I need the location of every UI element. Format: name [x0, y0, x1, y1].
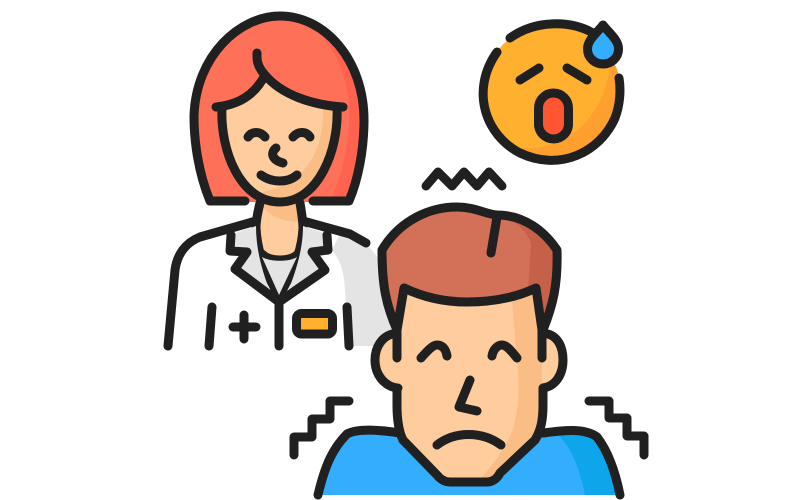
- icon: sweating shocked emoji: [483, 24, 621, 162]
- patient eyes: [421, 345, 517, 358]
- icon: doctor hair: [194, 16, 364, 202]
- patient nose: [459, 380, 477, 411]
- emoji outline: [483, 24, 620, 160]
- icon: medical cross: [233, 315, 256, 339]
- stress squiggle above head: [426, 172, 502, 186]
- icon: doctor face: [216, 53, 343, 202]
- patient ears: [375, 334, 563, 388]
- doctor smile: [261, 175, 297, 181]
- doctor nose: [273, 148, 283, 163]
- doctor eyes: [248, 132, 310, 137]
- shaking mark right: [589, 401, 644, 455]
- name badge: [296, 314, 332, 334]
- doctor fringe: [216, 53, 343, 107]
- patient hair parting: [491, 217, 497, 253]
- coat shoulders: [168, 221, 256, 346]
- coat lapels: [230, 235, 328, 302]
- patient frown: [437, 434, 501, 445]
- doctor coat shadow: [332, 234, 392, 346]
- icon: sweat drop: [588, 25, 618, 64]
- patient shirt: [318, 430, 620, 495]
- icon: doctor neck: [256, 203, 303, 296]
- figure: stressed patient: [294, 207, 644, 495]
- emoji brows: [520, 68, 587, 80]
- figure: female doctor: [168, 16, 392, 346]
- emoji mouth: [538, 93, 568, 139]
- coat pocket lines: [209, 307, 349, 346]
- coat placket: [274, 302, 284, 346]
- shaking mark left: [294, 401, 349, 455]
- patient hair: [382, 207, 557, 332]
- doctor white coat: [168, 221, 366, 346]
- patient face: [397, 217, 543, 482]
